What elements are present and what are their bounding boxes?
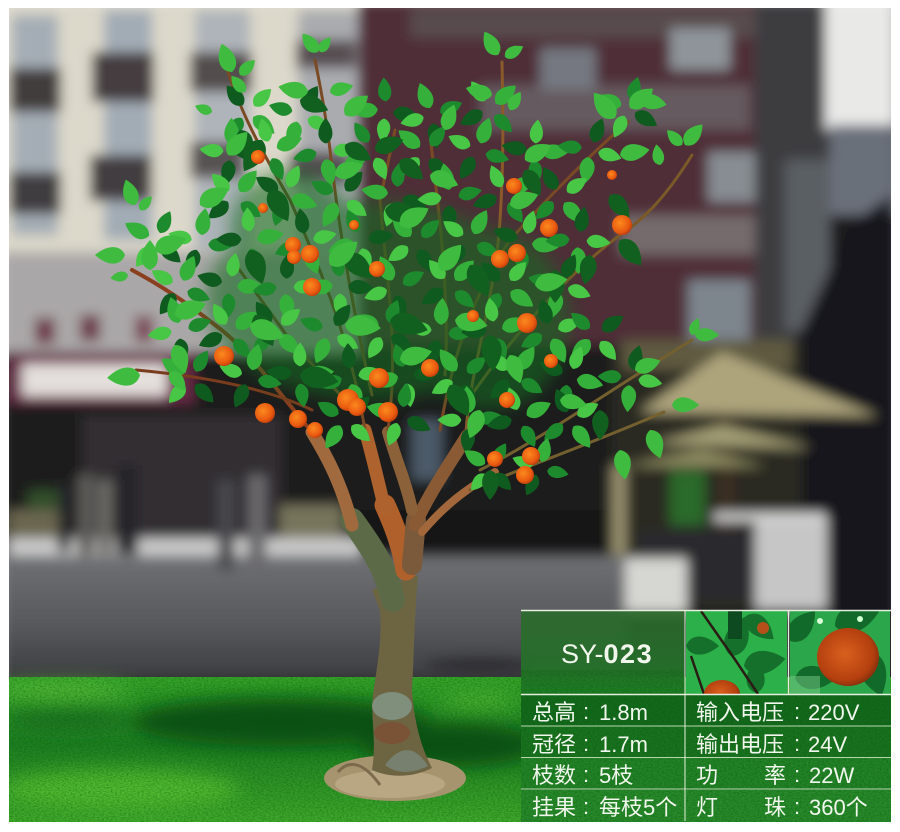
spec: input voltage: 220V [808,700,860,725]
shop sign [9,353,194,403]
spec: LED beads [696,794,868,820]
bright outer leaves [95,28,719,481]
spec: output voltage: : [794,731,800,756]
spec: input voltage [696,699,860,725]
spec: fruit per branch: : [583,794,589,819]
spec: LED beads: 灯 [696,795,718,820]
spec: branch count: 5枝 [599,763,633,788]
spec: crown diameter: 1.7m [599,732,648,757]
tree [95,28,719,801]
leaf clusters filling the canopy [122,66,672,501]
spec: power: 功 [696,763,718,788]
spec: input voltage: 输入电压 [696,700,784,725]
spec: LED beads: : [794,794,800,819]
photo thumbnail: leaves and fruit [686,611,787,694]
spec: fruit per branch [532,794,677,820]
model header: SY-023 [561,639,653,669]
spec: fruit per branch: 挂果 [532,795,576,820]
spec: total height: 总高 [532,700,576,725]
grey tower and bright sky [748,8,891,458]
pavement and road [9,538,361,556]
canopy shade under the foliage [205,170,570,410]
spec: power: 22W [809,763,854,788]
cream apartment building [0,0,362,352]
spec: crown diameter: : [583,731,589,756]
spec: power [696,762,854,788]
spec: crown diameter: 冠径 [532,732,576,757]
spec: LED beads: 360个 [809,795,868,820]
spec: crown diameter [532,731,648,757]
spec: output voltage: 输出电压 [696,732,784,757]
photo thumbnail: fruit close-up [790,611,890,694]
spec: branch count: : [583,762,589,787]
spec: total height: 1.8m [599,700,648,725]
spec: input voltage: : [794,699,800,724]
spec: fruit per branch: 每枝5个 [599,795,677,820]
patio with umbrellas [612,340,878,612]
table lines [521,610,891,821]
spec panel [521,597,894,822]
spec: power: 率 [764,763,786,788]
trunk and main limbs [312,430,495,776]
pedestrians [58,465,266,570]
spec: total height: : [583,699,589,724]
dark leaves [233,92,648,500]
base mound [324,755,466,801]
spec: branch count: 枝数 [532,763,576,788]
spec: output voltage: 24V [808,732,847,757]
spec: branch count [532,762,633,788]
thin branches [132,60,692,490]
lawn [0,677,900,827]
maroon hotel building [358,0,783,345]
spec: LED beads: 珠 [764,795,786,820]
spec: power: : [794,762,800,787]
spec: total height [532,699,648,725]
spec: output voltage [696,731,847,757]
model header [521,611,685,694]
spec table background [521,695,891,822]
fruits [214,150,632,484]
